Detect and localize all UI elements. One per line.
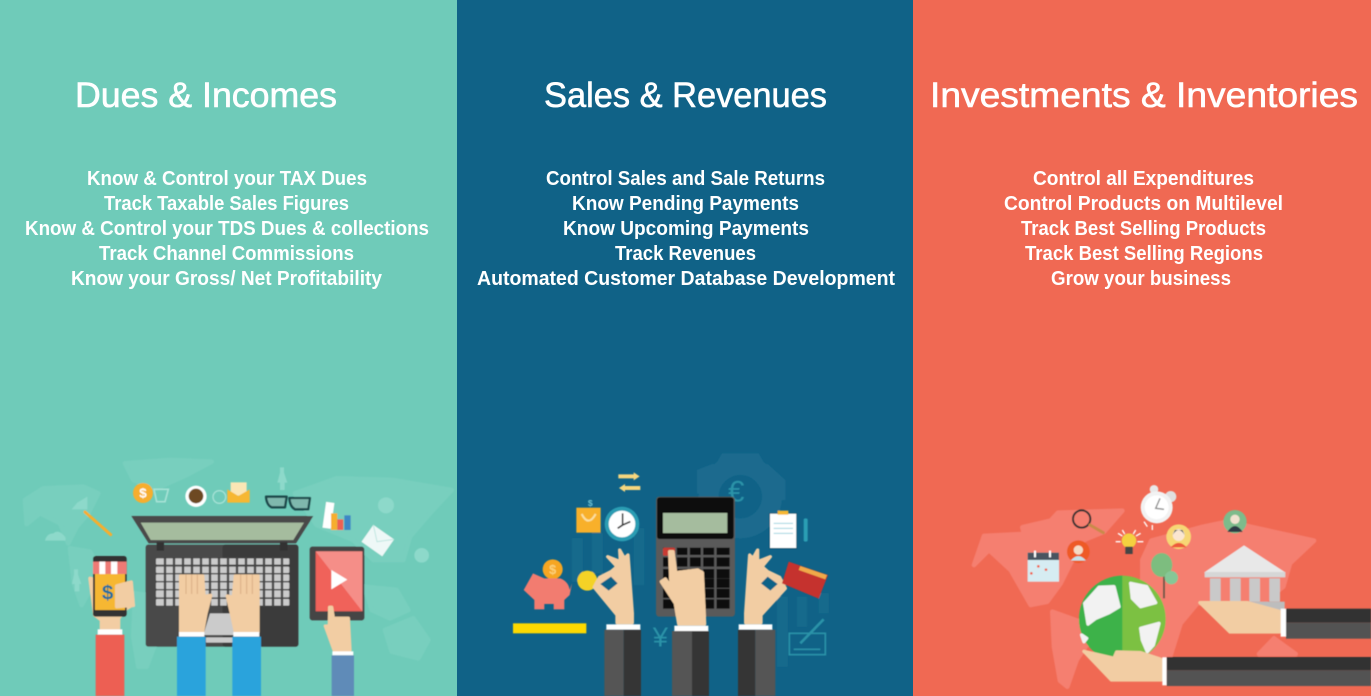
text block: dues and incomes list: Track Channel Commissions	[99, 243, 354, 265]
icon: alarm clock	[1141, 485, 1176, 530]
icon: world map background	[25, 460, 452, 667]
icon: gear background	[697, 453, 785, 528]
icon: piggy bank: $	[549, 563, 556, 577]
panel: sales and revenues	[457, 0, 914, 696]
icon: light bulb	[1116, 530, 1143, 554]
icon: world map background	[974, 511, 1314, 687]
icon: ruler	[513, 623, 586, 633]
icon: clipboard	[770, 511, 808, 548]
icon: gear background: €	[728, 475, 744, 508]
text block: sales and revenues list: Know Pending Payments	[572, 193, 799, 215]
illustration: calculator and hands	[513, 453, 829, 696]
text block: investments and inventories list: Control all Expenditures	[1033, 168, 1254, 190]
text block: dues and incomes list: Know your Gross/ Net Profitability	[71, 268, 383, 290]
icon: faint background symbols	[45, 467, 429, 591]
panel: investments and inventories	[913, 0, 1371, 696]
icon: glasses	[266, 497, 310, 509]
icon: globe	[1079, 576, 1166, 662]
text block: dues and incomes list: Know & Control your TAX Dues	[87, 168, 367, 190]
icon: pencil	[85, 512, 111, 535]
icon: tree	[1151, 553, 1178, 598]
text block: dues and incomes list	[25, 168, 429, 290]
text block: sales and revenues list	[477, 168, 895, 290]
icon: center hand	[661, 552, 709, 696]
icon: envelope	[227, 482, 250, 503]
heading: sales and revenues: Sales & Revenues	[544, 76, 827, 115]
icon: upper hand holding bank	[1200, 603, 1371, 639]
icon: typing hands	[177, 575, 261, 696]
icon: yen symbol: ¥	[652, 622, 669, 653]
icon: background bars	[572, 528, 829, 667]
icon: laptop	[131, 516, 313, 647]
icon: tablet and hand	[310, 547, 364, 696]
icon: calculator	[656, 497, 735, 617]
icon: bar chart	[323, 502, 351, 530]
text block: investments and inventories list: Grow your business	[1051, 268, 1231, 290]
text block: investments and inventories list: Control Products on Multilevel	[1004, 193, 1283, 215]
icon: left hand with coin	[577, 550, 641, 696]
text block: dues and incomes list: Know & Control your TDS Dues & collections	[25, 218, 429, 240]
text block: dues and incomes list: Track Taxable Sales Figures	[104, 193, 349, 215]
text block: sales and revenues list: Automated Customer Database Development	[477, 268, 895, 290]
icon: mail	[361, 525, 394, 556]
heading: investments and inventories: Investments & Inventories	[930, 76, 1358, 115]
icon: person avatar green	[1223, 510, 1247, 533]
text block: investments and inventories list: Track Best Selling Regions	[1025, 243, 1263, 265]
icon: right hand with credit card	[738, 550, 828, 696]
heading: dues and incomes: Dues & Incomes	[75, 76, 337, 115]
text block: sales and revenues list: Control Sales and Sale Returns	[546, 168, 825, 190]
icon: cheque and pen	[789, 619, 825, 655]
icon: calendar	[1028, 551, 1059, 582]
icon: shopping bag: $	[588, 498, 593, 508]
illustration: globe and bank in hands	[974, 485, 1371, 687]
text block: investments and inventories list: Track Best Selling Products	[1021, 218, 1266, 240]
icon: piggy bank	[524, 559, 572, 609]
keyboard	[156, 558, 289, 643]
icon: magnifier	[1073, 510, 1103, 533]
icon: dollar coin and cart	[133, 483, 168, 503]
icon: lower hand holding globe	[1084, 651, 1371, 686]
icon: coffee cup	[185, 486, 226, 507]
text block: sales and revenues list: Know Upcoming Payments	[563, 218, 809, 240]
text block: sales and revenues list: Track Revenues	[615, 243, 756, 265]
icon: phone in hand: $	[102, 581, 114, 604]
icon: clock	[605, 507, 639, 541]
icon: person avatar orange	[1067, 540, 1090, 563]
icon: shopping bag	[576, 498, 601, 533]
icon: dollar coin and cart: $	[139, 486, 147, 501]
icon: person avatar yellow	[1166, 524, 1191, 549]
icon: bank building	[1204, 545, 1286, 610]
text block: investments and inventories list	[1004, 168, 1283, 290]
panel: dues and incomes	[0, 0, 457, 696]
icon: phone in hand	[90, 556, 133, 696]
icon: exchange arrows	[618, 472, 640, 492]
illustration: laptop and hands	[25, 460, 452, 696]
